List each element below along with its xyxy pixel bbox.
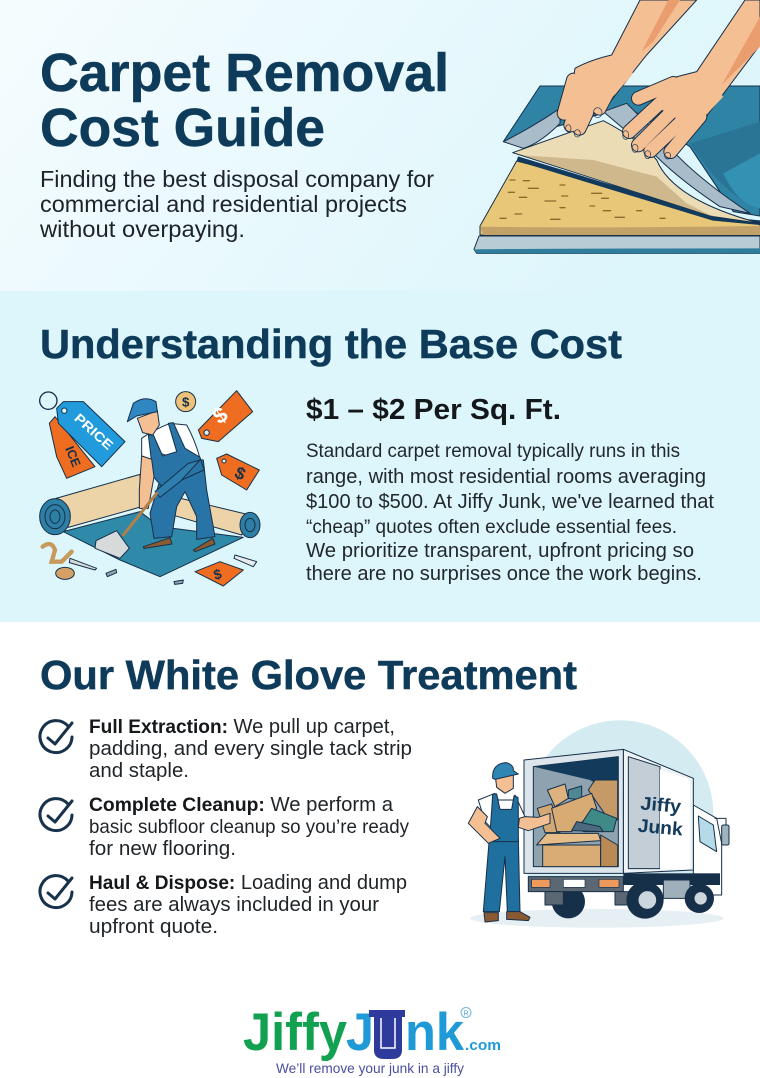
truck lettering: Junk	[637, 815, 684, 840]
subtitle: Finding the best disposal company for	[40, 166, 434, 192]
list item: haul and dispose: fees are always included in your	[89, 893, 379, 916]
paragraph: “cheap” quotes often exclude essential fees.	[306, 516, 677, 538]
price tags	[40, 391, 259, 586]
title	[40, 43, 449, 158]
logo: Jiffy Junk	[243, 1003, 501, 1076]
illustration: worker removing carpet with price tags	[40, 391, 260, 586]
logo: Jiffy Junk: R	[463, 1010, 469, 1018]
illustration: worker and Jiffy Junk truck	[468, 720, 729, 928]
price tags: $	[232, 462, 249, 485]
logo: Jiffy Junk: .com	[465, 1038, 501, 1054]
worker	[468, 763, 550, 922]
paragraph: range, with most residential rooms averaging	[306, 466, 706, 488]
logo: Jiffy Junk: nk	[405, 1003, 464, 1062]
list item: full extraction: padding, and every single tack strip	[89, 737, 412, 760]
paragraph: Standard carpet removal typically runs in this	[306, 440, 680, 462]
title: Carpet Removal	[40, 43, 449, 103]
list item: full extraction: Full Extraction: We pull up carpet,	[89, 715, 395, 738]
truck lettering	[637, 792, 684, 840]
heading: Understanding the Base Cost	[40, 321, 622, 367]
price tags: $	[208, 402, 232, 429]
logo: Jiffy Junk: J	[346, 1003, 374, 1062]
panel: understanding the base cost	[0, 291, 760, 622]
panel: our white glove treatment	[0, 622, 760, 952]
paragraph: $100 to $500. At Jiffy Junk, we've learned that	[306, 491, 714, 513]
worker	[95, 399, 215, 558]
list item: full extraction	[40, 715, 412, 782]
icon: check circle	[40, 876, 72, 908]
subtitle: without overpaying.	[39, 216, 245, 242]
carpet and rolls	[40, 474, 260, 577]
list item: haul and dispose: upfront quote.	[89, 915, 218, 938]
list item: haul and dispose	[40, 871, 407, 938]
tagline: We’ll remove your junk in a jiffy	[276, 1060, 464, 1076]
price tags: $	[182, 395, 190, 410]
price tags: $	[212, 565, 224, 583]
price headline: $1 – $2 Per Sq. Ft.	[306, 394, 561, 426]
cargo boxes	[537, 780, 618, 867]
scattered tools	[43, 544, 257, 584]
list item: complete cleanup: for new flooring.	[89, 837, 236, 860]
list item: complete cleanup: basic subfloor cleanup so you’re ready	[89, 816, 409, 838]
icon: plunger U	[369, 1010, 405, 1059]
list item: complete cleanup: Complete Cleanup: We perform a	[89, 793, 394, 816]
right arm and hand	[629, 0, 760, 152]
icon: check circle	[40, 799, 72, 831]
truck	[524, 749, 729, 919]
list item: haul and dispose: Haul & Dispose: Loading and dump	[89, 871, 407, 894]
icon: check circle	[40, 721, 72, 753]
title: Cost Guide	[40, 98, 325, 158]
heading: Our White Glove Treatment	[40, 652, 577, 698]
truck lettering: Jiffy	[640, 792, 683, 817]
paragraph: We prioritize transparent, upfront pricing so	[306, 540, 694, 562]
list item: complete cleanup	[40, 793, 409, 860]
logo: Jiffy Junk: Jiffy	[243, 1003, 347, 1062]
left arm and hand	[564, 0, 697, 128]
subtitle	[39, 166, 434, 242]
paragraph	[306, 440, 714, 585]
illustration: hands peeling back carpet	[474, 0, 760, 253]
paragraph: there are no surprises once the work begins.	[306, 563, 702, 585]
list item: full extraction: and staple.	[89, 759, 189, 782]
subtitle: commercial and residential projects	[40, 191, 407, 217]
price tags: PRICE	[71, 410, 116, 453]
panel: hero	[0, 0, 760, 292]
price tags: ICE	[62, 444, 83, 469]
